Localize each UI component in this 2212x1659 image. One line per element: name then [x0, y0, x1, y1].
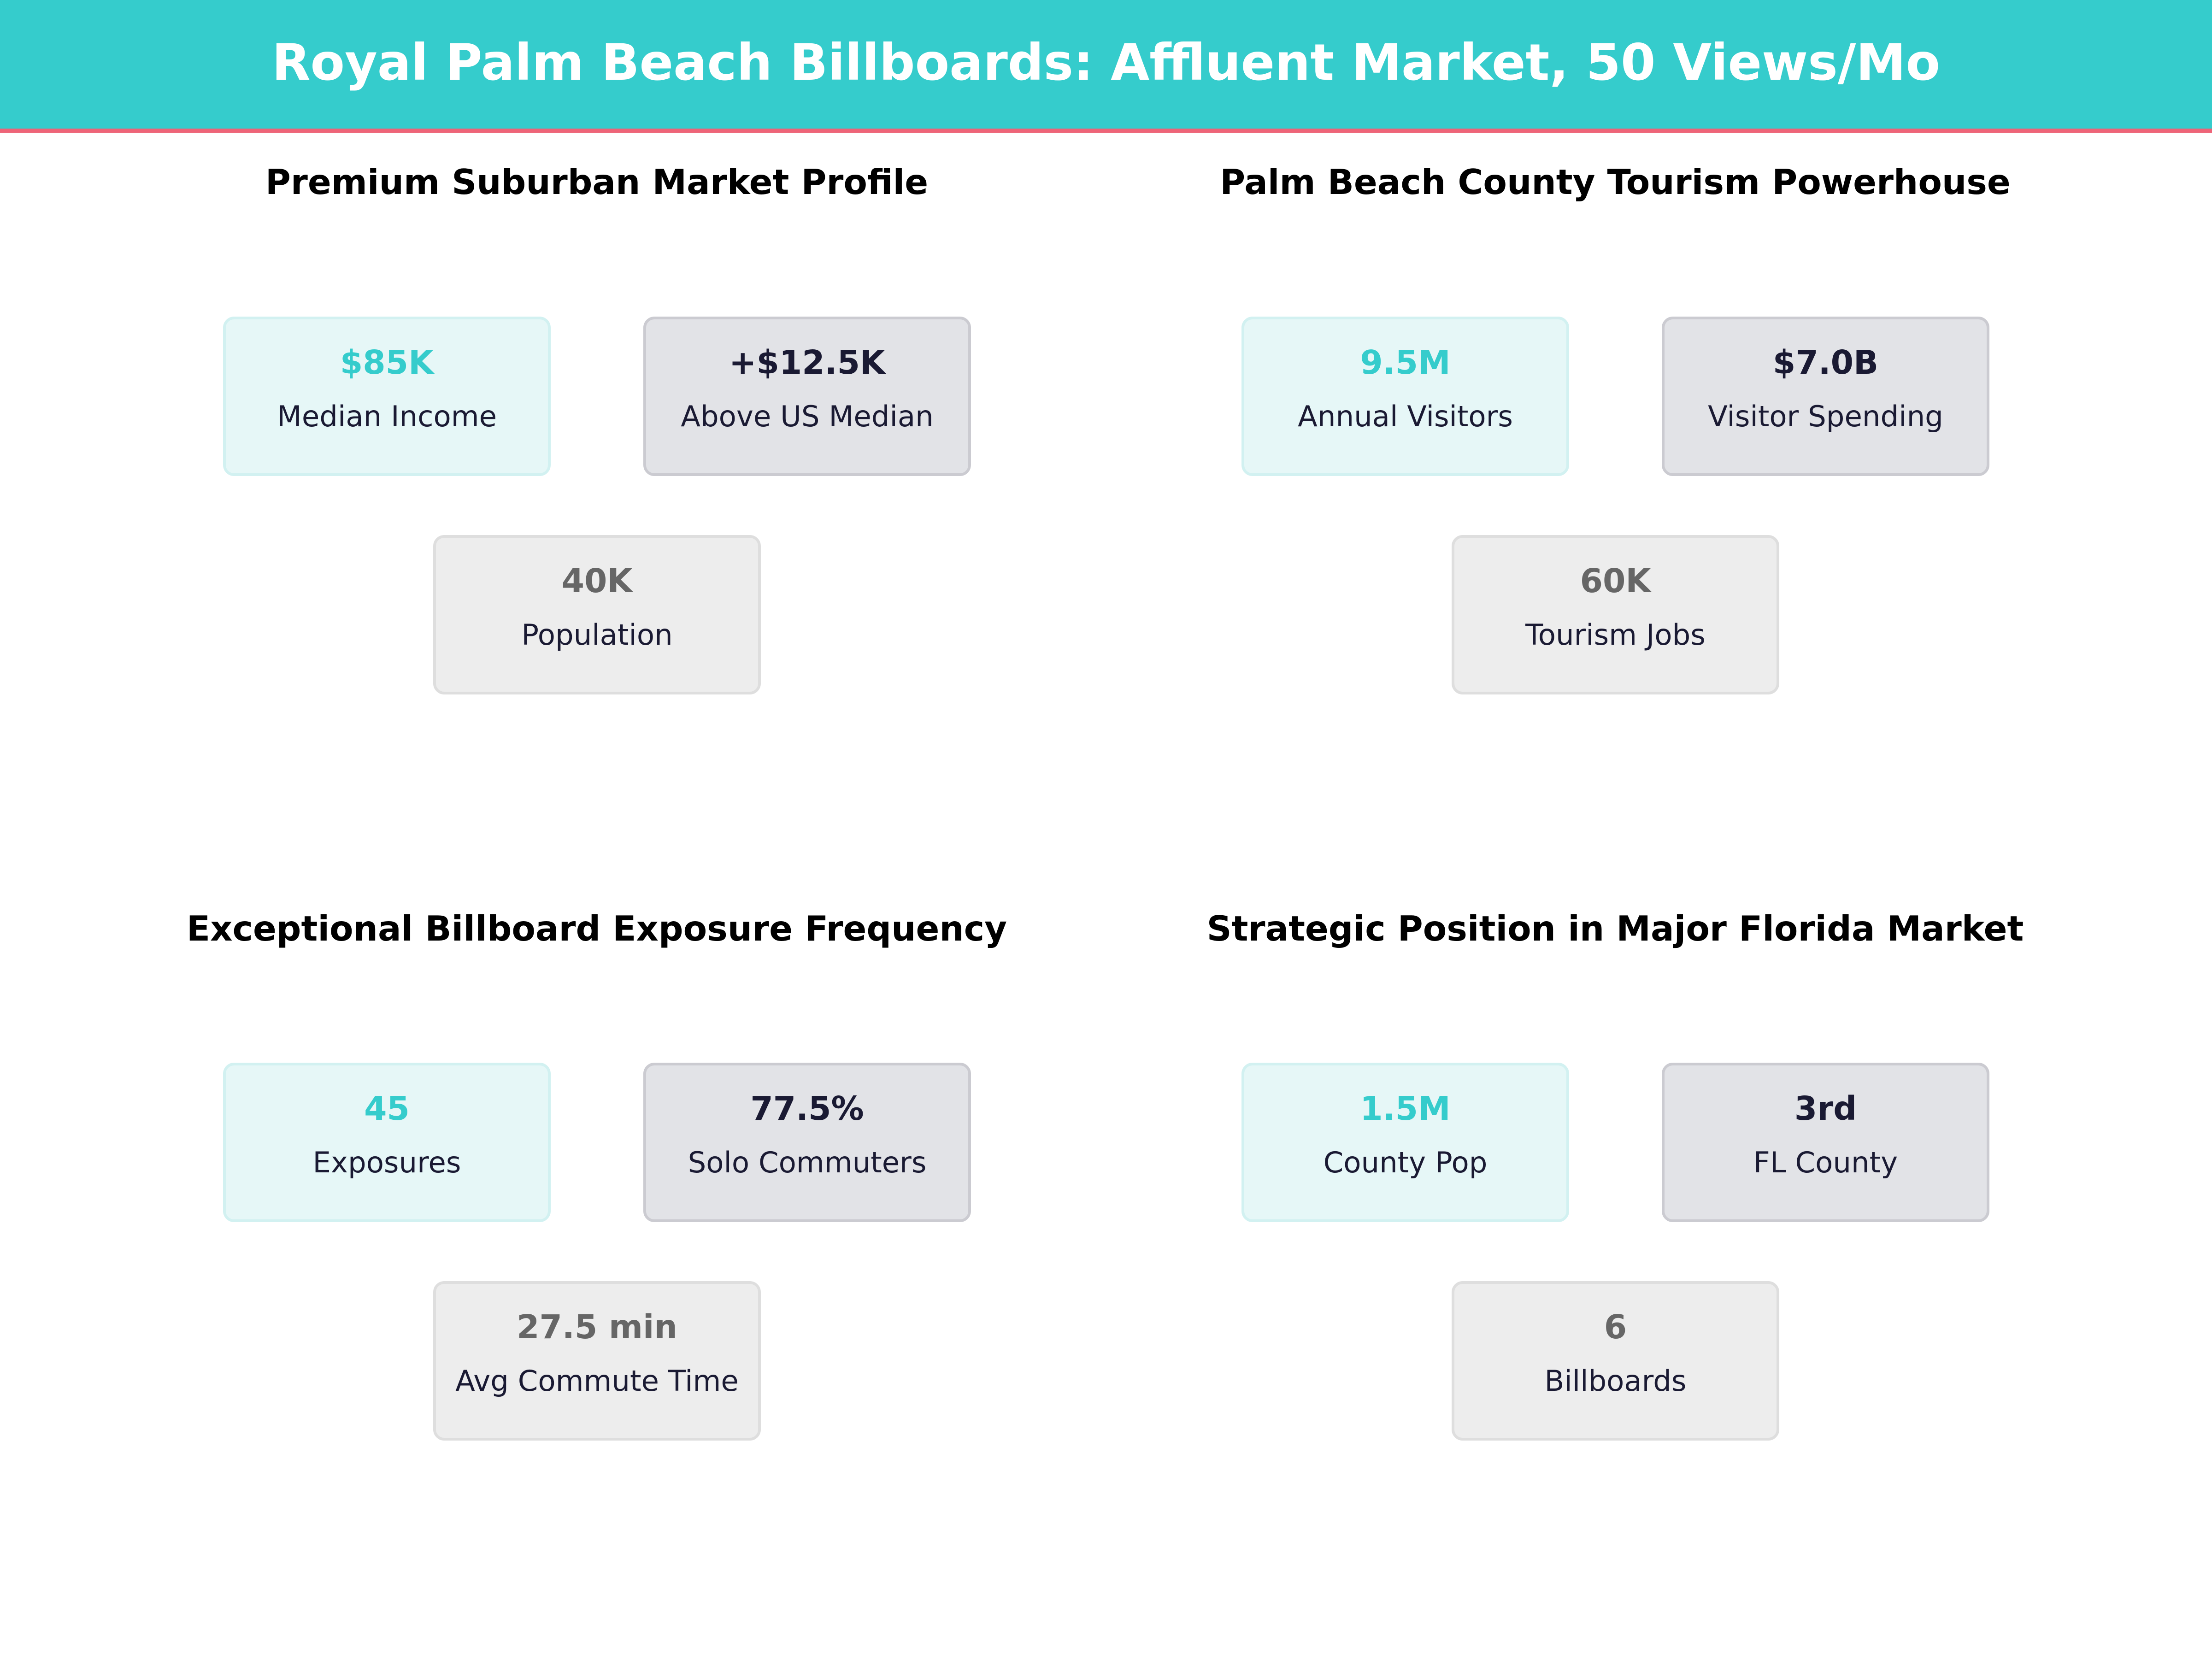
- card: above US median: +$12.5K: [729, 343, 885, 382]
- card: visitor spending: Visitor Spending: [1708, 400, 1943, 433]
- card: annual visitors: 9.5M: [1360, 343, 1451, 382]
- card: above US median: [643, 317, 971, 476]
- panel: exposure frequency: [0, 885, 1106, 1484]
- card: population: 40K: [562, 562, 632, 600]
- card: exposures: 45: [364, 1089, 410, 1128]
- card: exposures: [223, 1063, 551, 1222]
- title: Royal Palm Beach Billboards: Affluent Market, 50 Views/Mo: [272, 33, 1940, 92]
- card: billboards: Billboards: [1544, 1364, 1687, 1398]
- card: annual visitors: Annual Visitors: [1298, 400, 1513, 433]
- card: annual visitors: [1241, 317, 1569, 476]
- card: tourism jobs: 60K: [1580, 562, 1651, 600]
- card: county pop: County Pop: [1324, 1146, 1487, 1179]
- card: FL county: 3rd: [1794, 1089, 1857, 1128]
- card: solo commuters: [643, 1063, 971, 1222]
- card: FL county: [1662, 1063, 1989, 1222]
- card: median income: [223, 317, 551, 476]
- card: above US median: Above US Median: [681, 400, 934, 433]
- heading: market profile: Premium Suburban Market Profile: [265, 162, 928, 202]
- card: population: Population: [521, 618, 673, 652]
- card: visitor spending: [1662, 317, 1989, 476]
- header banner: [0, 0, 2212, 133]
- card: exposures: Exposures: [313, 1146, 461, 1179]
- card: population: [433, 535, 761, 694]
- heading: strategic: Strategic Position in Major Florida Market: [1207, 908, 2024, 949]
- card: FL county: FL County: [1753, 1146, 1898, 1179]
- card: median income: $85K: [340, 343, 434, 382]
- card: tourism jobs: Tourism Jobs: [1525, 618, 1706, 652]
- card: solo commuters: Solo Commuters: [688, 1146, 926, 1179]
- card: tourism jobs: [1452, 535, 1779, 694]
- card: commute time: [433, 1281, 761, 1441]
- card: median income: Median Income: [277, 400, 497, 433]
- panel: strategic position: [1106, 885, 2212, 1484]
- card: county pop: [1241, 1063, 1569, 1222]
- card: solo commuters: 77.5%: [750, 1089, 864, 1128]
- heading: exposure: Exceptional Billboard Exposure Frequency: [187, 908, 1007, 949]
- card: billboards: [1452, 1281, 1779, 1441]
- card: visitor spending: $7.0B: [1773, 343, 1878, 382]
- card: commute time: Avg Commute Time: [455, 1364, 739, 1398]
- heading: tourism: Palm Beach County Tourism Powerhouse: [1220, 162, 2011, 202]
- panel: tourism: [1106, 138, 2212, 737]
- panel: market profile: [0, 138, 1106, 737]
- card: county pop: 1.5M: [1360, 1089, 1451, 1128]
- card: billboards: 6: [1604, 1308, 1627, 1346]
- card: commute time: 27.5 min: [517, 1308, 677, 1346]
